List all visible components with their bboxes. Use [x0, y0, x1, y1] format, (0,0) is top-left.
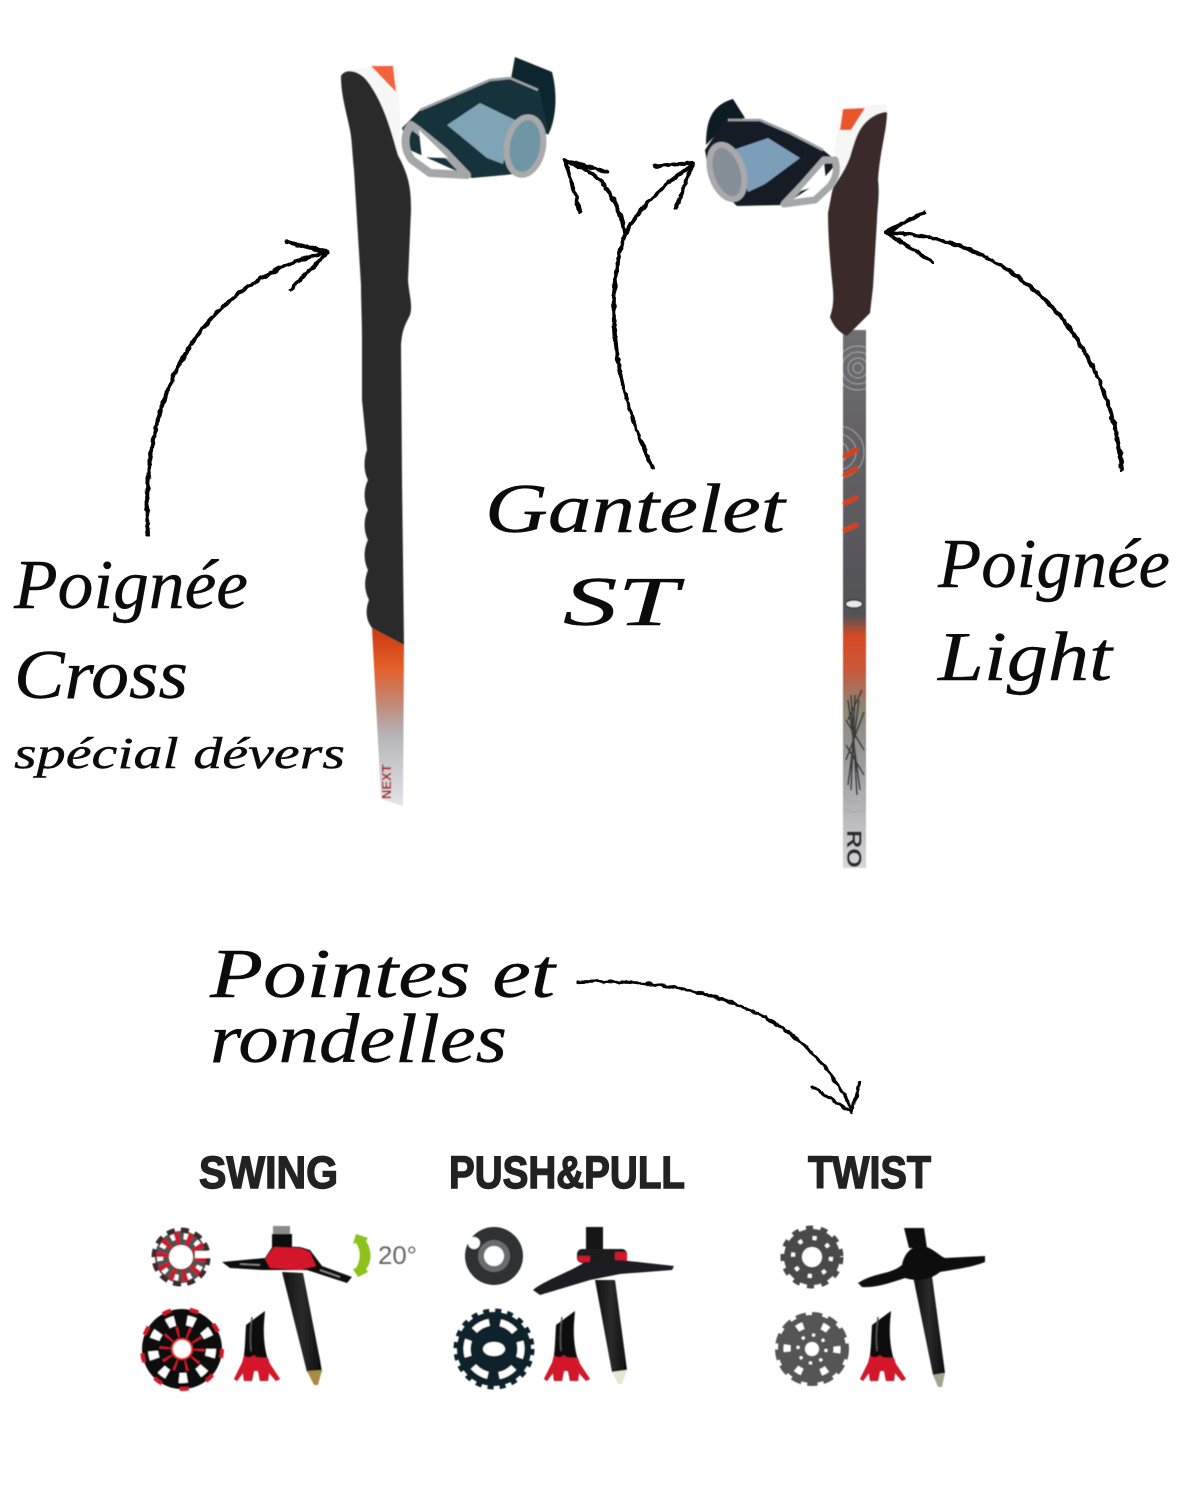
basket and tip: [222, 1226, 352, 1385]
label: Poignée Light: [937, 526, 1170, 696]
arrow: gauntlet fork: [565, 160, 693, 468]
TWIST set: [778, 1228, 985, 1387]
shaft logo: [846, 600, 862, 608]
blue panel: [733, 138, 800, 192]
tilt arrow: [353, 1234, 370, 1277]
strap loop: [706, 99, 745, 145]
grey frame: [784, 160, 836, 204]
PUSH&PULL set: [456, 1227, 674, 1387]
tilt value: 20°: [378, 1242, 417, 1270]
foot pad: [234, 1311, 280, 1381]
heading: SWING: SWING: [199, 1147, 338, 1198]
label: Gantelet ST: [485, 471, 787, 641]
SWING set: [142, 1226, 417, 1389]
left pole with Cross grip: [341, 66, 411, 806]
strap body: [402, 78, 548, 178]
left gauntlet strap: [402, 57, 555, 178]
right pole with Light grip: [827, 105, 888, 868]
strap loop: [508, 57, 555, 135]
Light grip: [828, 112, 887, 336]
orange cap mark: [371, 66, 396, 92]
orange cap mark: [840, 108, 865, 130]
cuff: [703, 140, 751, 204]
foot pad: [544, 1311, 590, 1381]
grey frame: [405, 125, 467, 175]
shaft brand scribble: [846, 690, 864, 795]
white grip cap: [832, 104, 887, 215]
basket and tip: [858, 1228, 985, 1387]
right shaft: [843, 330, 866, 868]
strap body: [705, 120, 838, 206]
large basket wheel: [142, 1309, 222, 1389]
shaft contour pattern: [842, 345, 866, 812]
label: Poignée Light: Light: [937, 619, 1114, 696]
small basket wheel: [783, 1228, 841, 1286]
top edge trim: [420, 78, 538, 110]
basket and tip: [533, 1227, 674, 1384]
label: Poignée Cross: Cross: [14, 637, 188, 714]
label: Gantelet ST: ST: [563, 564, 686, 641]
arrow: tips and baskets: [578, 982, 860, 1112]
left shaft: [372, 628, 404, 806]
Cross grip: [341, 71, 411, 645]
label: Poignée Cross: Poignée: [13, 547, 248, 624]
top edge trim: [728, 120, 823, 150]
arrow: Light grip: [886, 212, 1122, 470]
cuff: [502, 114, 548, 178]
label: Pointes et rondelles: Pointes et: [209, 936, 557, 1013]
blue panel: [447, 103, 515, 164]
large basket wheel: [778, 1315, 846, 1383]
foot pad: [860, 1311, 906, 1381]
label: Pointes et rondelles: rondelles: [210, 1001, 507, 1078]
label: Poignée Cross: spécial dévers: [14, 729, 345, 778]
label: Gantelet ST: Gantelet: [485, 471, 787, 548]
label: Pointes et rondelles: [209, 936, 557, 1078]
right gauntlet strap: [703, 99, 838, 206]
large basket wheel: [456, 1311, 532, 1387]
heading: PUSH&PULL: PUSH&PULL: [449, 1147, 685, 1198]
label: Poignée Light: Poignée: [937, 526, 1170, 603]
label: Poignée Cross: [13, 547, 345, 778]
small basket disc: [465, 1227, 523, 1285]
shaft lettering: RO: [842, 830, 866, 868]
arrow: Cross grip: [147, 242, 328, 535]
left shaft lettering: NEXT: [379, 764, 394, 799]
white grip cap: [345, 67, 400, 160]
small basket wheel: [154, 1230, 213, 1284]
heading: TWIST: TWIST: [808, 1147, 931, 1198]
red shaft dashes: [845, 450, 856, 530]
